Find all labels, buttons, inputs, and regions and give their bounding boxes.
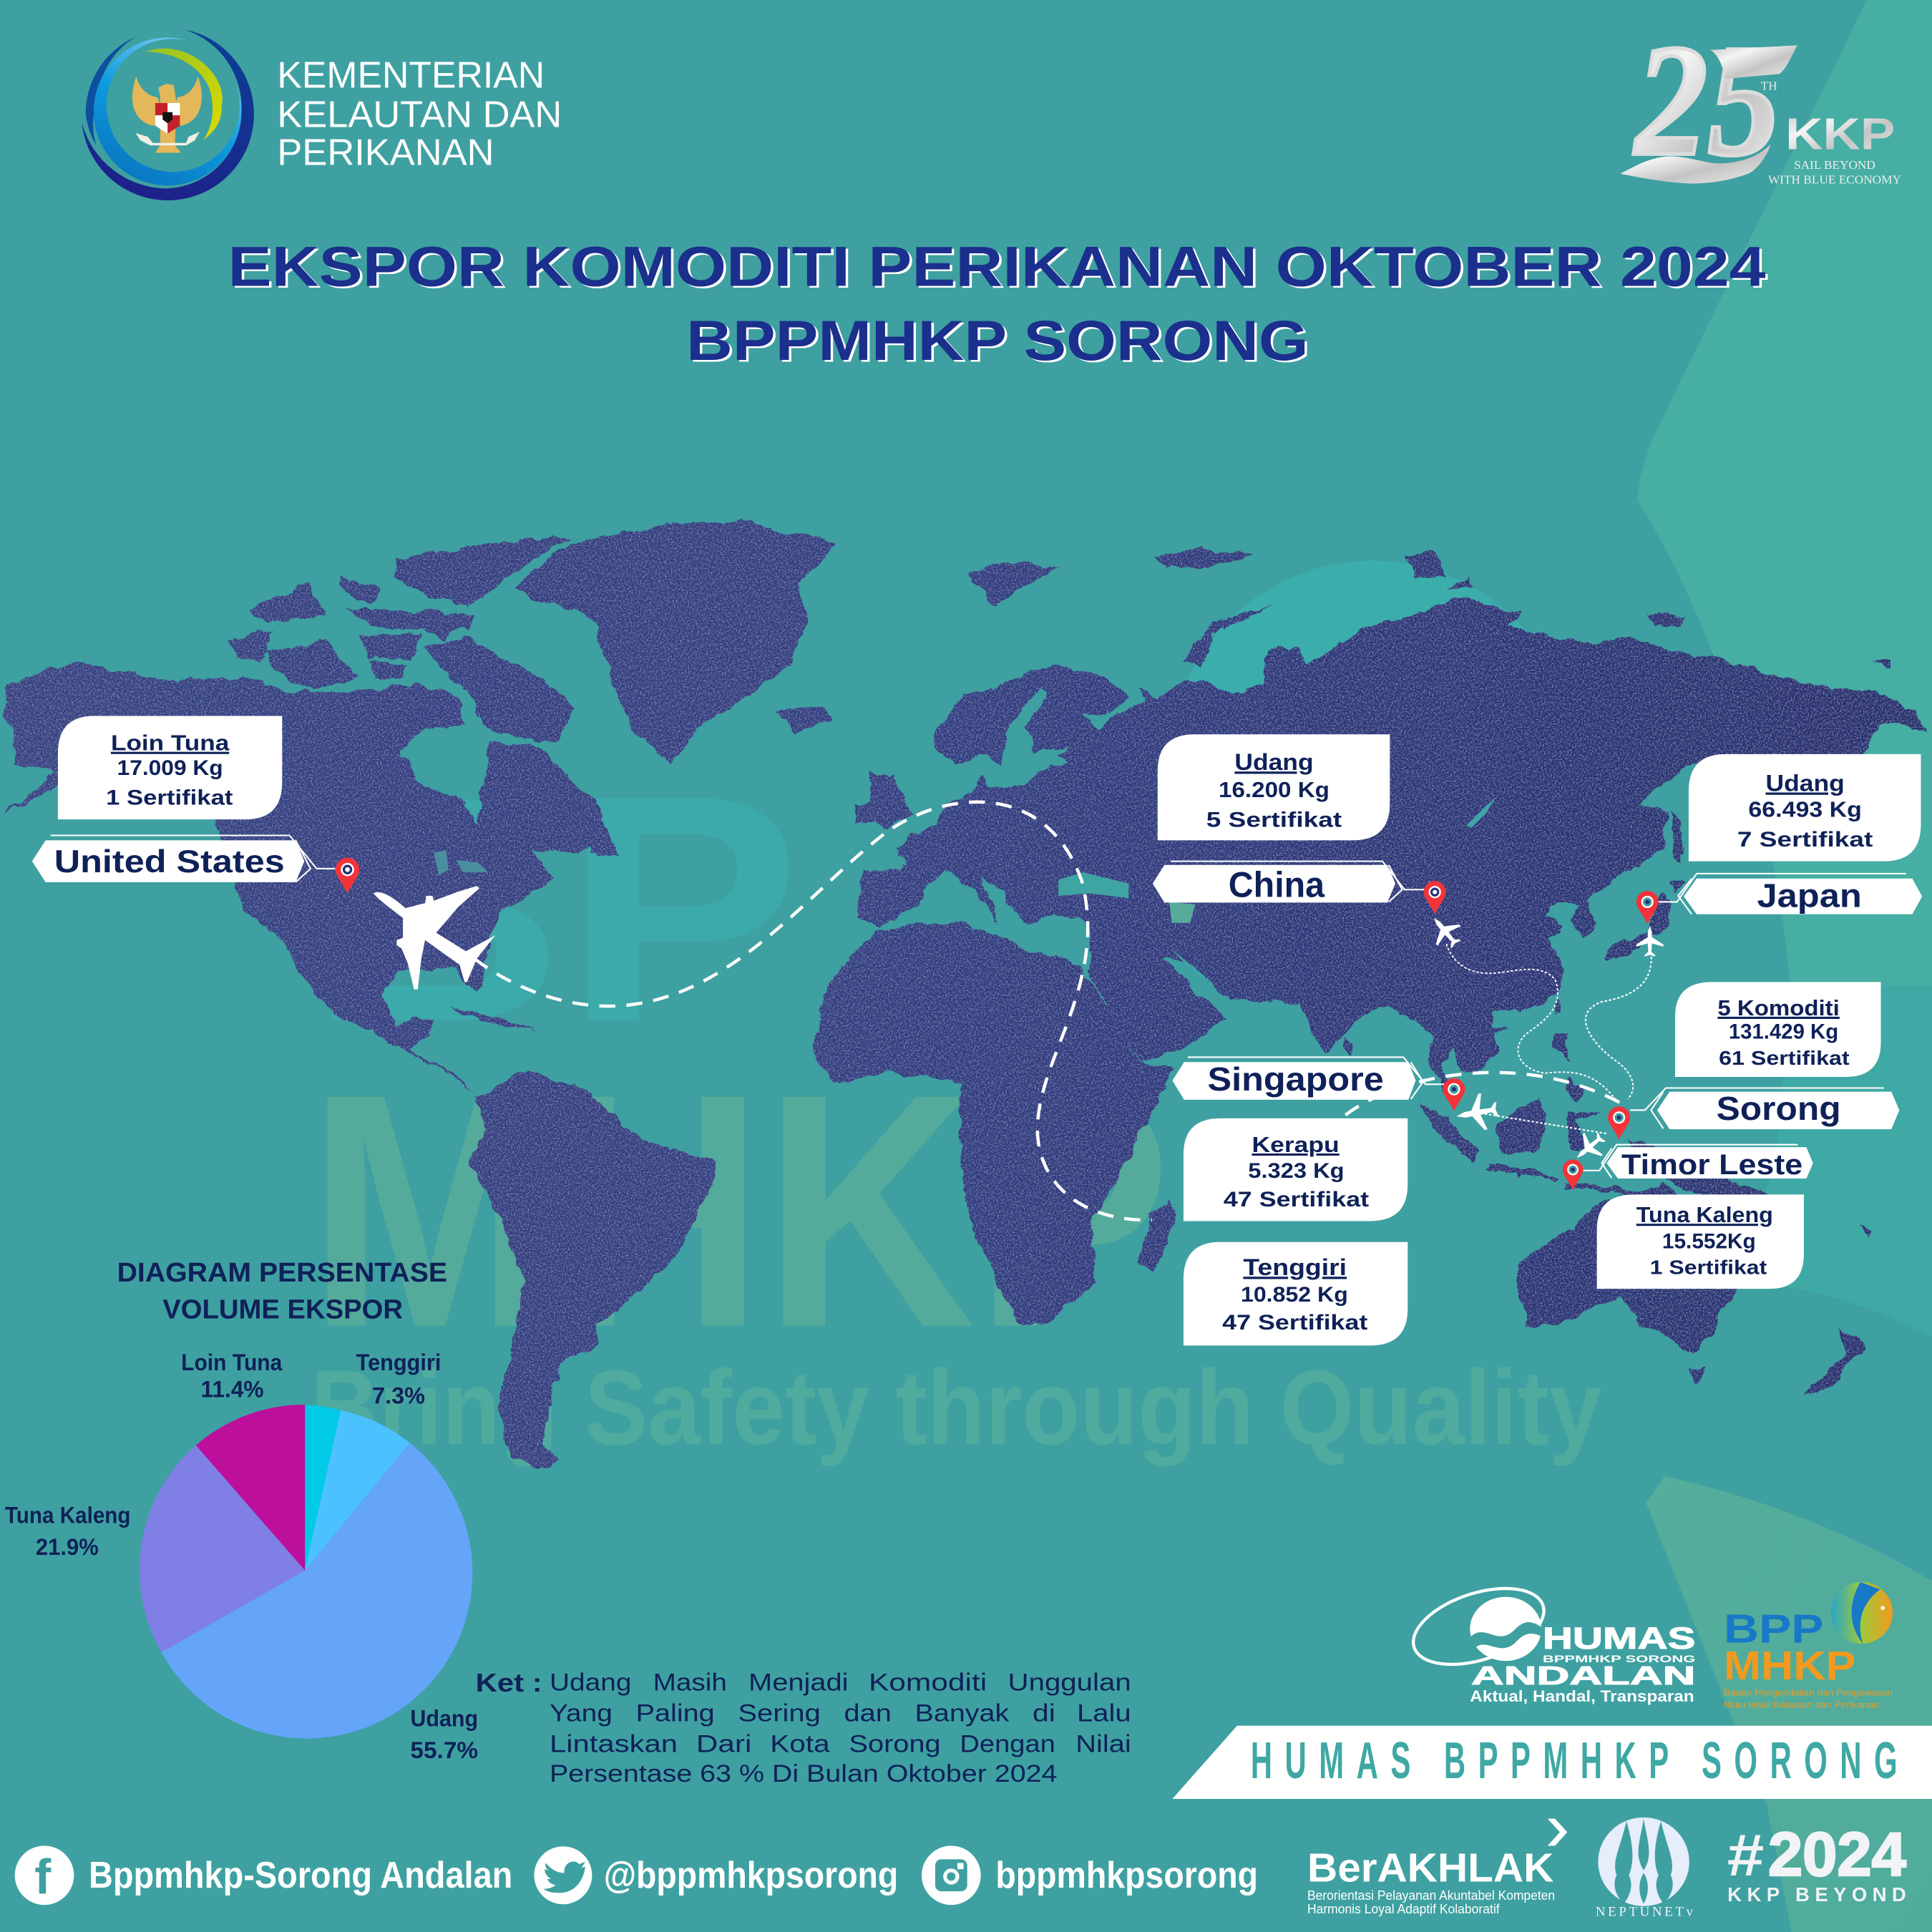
logo: 25th KKP anniversary: WITH BLUE ECONOMY xyxy=(1768,173,1901,187)
logo: 25th KKP anniversary: KKP xyxy=(1785,109,1895,159)
map: Arctic islands xyxy=(230,537,618,857)
text block: keterangan: Komoditi xyxy=(869,1669,987,1696)
logo: Humas Andalan xyxy=(1404,1574,1695,1705)
map: Africa xyxy=(813,923,1176,1324)
callout: Udang Japan: 66.493 Kg xyxy=(1748,797,1862,822)
pie labels: 55.7% xyxy=(410,1737,478,1763)
icon: large airplane xyxy=(374,886,495,990)
logo: #2024 KKP Beyond xyxy=(1726,1820,1906,1906)
map: Kamchatka xyxy=(1775,737,1873,850)
logo: BerAKHLAK: Berorientasi Pelayanan Akuntabel Kompeten xyxy=(1307,1888,1555,1903)
title: BPPMHKP SORONG xyxy=(686,308,1309,372)
panel: China xyxy=(1153,734,1446,914)
callout: 5 Komoditi: 131.429 Kg xyxy=(1729,1021,1838,1044)
heading: ministry name xyxy=(277,54,562,173)
callout: Tuna Kaleng: Tuna Kaleng xyxy=(1636,1202,1773,1227)
text block: keterangan: Dari xyxy=(696,1731,751,1758)
panel: Timor Leste xyxy=(1563,1145,1813,1289)
label: United States: United States xyxy=(54,844,285,879)
connector: Sorong xyxy=(1630,1088,1884,1128)
pin: Singapore xyxy=(1443,1078,1465,1111)
callout: Udang China xyxy=(1158,734,1390,840)
social: Twitter xyxy=(534,1846,898,1904)
map: Svalbard and Arctic Russia islands xyxy=(966,548,1890,667)
map: Australia xyxy=(1518,1183,1756,1382)
text block: keterangan: Nilai xyxy=(1075,1731,1131,1758)
pin: Timor Leste xyxy=(1563,1159,1583,1190)
logo: BerAKHLAK xyxy=(1307,1819,1567,1916)
callout: 5 Komoditi: 61 Sertifikat xyxy=(1719,1047,1850,1069)
map: South-East Asia islands xyxy=(1343,998,1870,1237)
logo: BPP MHKP xyxy=(1724,1582,1893,1710)
text block: keterangan: Yang xyxy=(550,1700,613,1727)
map: North America xyxy=(2,663,618,1094)
label: China: China xyxy=(1229,865,1325,905)
banner: Humas BPPMHKP Sorong xyxy=(1172,1726,1932,1799)
callout: Udang Japan xyxy=(1689,754,1921,862)
logo: #2024 KKP Beyond: KKP BEYOND xyxy=(1727,1883,1906,1906)
connector: Singapore xyxy=(1188,1057,1444,1099)
pie labels: 11.4% xyxy=(201,1376,263,1402)
callout: Tenggiri xyxy=(1184,1242,1407,1345)
pin: Japan xyxy=(1636,891,1659,924)
text block: keterangan: Lintaskan xyxy=(550,1731,678,1758)
title: EKSPOR KOMODITI PERIKANAN OKTOBER 2024 xyxy=(230,236,1768,300)
label: Sorong xyxy=(1657,1090,1899,1129)
logo: #2024 KKP Beyond: 2024 xyxy=(1768,1820,1906,1889)
text block: keterangan: Udang xyxy=(550,1669,631,1696)
callout: Udang Japan: Udang xyxy=(1766,769,1845,796)
social: Facebook: f xyxy=(34,1850,52,1905)
banner: Humas BPPMHKP Sorong: HUMAS BPPMHKP SORONG xyxy=(1251,1731,1898,1790)
logo: Humas Andalan: ANDALAN xyxy=(1471,1661,1695,1690)
pin: Sorong xyxy=(1608,1106,1630,1140)
logo: #2024 KKP Beyond: # xyxy=(1726,1822,1763,1888)
icon: China small airplane xyxy=(1423,908,1468,955)
logo: BerAKHLAK: Harmonis Loyal Adaptif Kolaboratif xyxy=(1307,1902,1501,1916)
logo: 25th KKP anniversary xyxy=(1620,12,1901,189)
route: Japan dotted line xyxy=(1586,952,1652,1099)
callout: Loin Tuna xyxy=(58,716,282,819)
callout: Tuna Kaleng: 1 Sertifikat xyxy=(1650,1256,1767,1278)
text block: keterangan: Persentase 63 % Di Bulan Oktober 2024 xyxy=(550,1760,1057,1787)
pie labels: Tenggiri xyxy=(356,1349,441,1375)
text block: keterangan xyxy=(476,1668,1131,1787)
text block: keterangan: Paling xyxy=(636,1700,715,1727)
text block: keterangan: Menjadi xyxy=(748,1669,849,1696)
callout: Loin Tuna: 1 Sertifikat xyxy=(106,786,233,809)
route: Singapore dotted line xyxy=(1485,1114,1606,1133)
logo: Neptune TV xyxy=(1596,1818,1693,1920)
title: BPPMHKP SORONG xyxy=(689,310,1311,374)
callout: Tenggiri: 47 Sertifikat xyxy=(1222,1312,1368,1335)
social: Facebook: Bppmhkp-Sorong Andalan xyxy=(89,1854,512,1896)
pie labels: 7.3% xyxy=(372,1382,425,1408)
label: Singapore: Singapore xyxy=(1208,1060,1384,1098)
watermark: slogan: Bring Safety through Quality xyxy=(311,1349,1602,1467)
connector: Timor Leste xyxy=(1584,1145,1797,1178)
label: United States xyxy=(32,840,304,882)
callout: Kerapu: 5.323 Kg xyxy=(1248,1160,1345,1183)
label: Singapore xyxy=(1172,1060,1416,1100)
panel: United States xyxy=(32,716,359,894)
logo: 25th KKP anniversary: SAIL BEYOND xyxy=(1794,158,1875,172)
social: Instagram: bppmhkpsorong xyxy=(995,1854,1258,1896)
title xyxy=(228,234,1768,374)
map: Greenland xyxy=(514,521,838,763)
map: Iceland xyxy=(776,708,831,733)
callout: Udang China: Udang xyxy=(1234,748,1314,775)
callout: Tenggiri: Tenggiri xyxy=(1243,1254,1347,1280)
pie labels: Loin Tuna xyxy=(181,1349,283,1375)
connector: United States xyxy=(51,835,335,882)
icon: Japan small airplane xyxy=(1636,926,1664,957)
callout: Tenggiri: 10.852 Kg xyxy=(1241,1284,1348,1307)
callout: Udang Japan: 7 Sertifikat xyxy=(1737,829,1873,852)
watermark: BPP letters: BP xyxy=(308,728,801,1089)
text block: keterangan: dan xyxy=(844,1700,892,1727)
callout: Loin Tuna: 17.009 Kg xyxy=(117,757,223,780)
callout: Kerapu: 47 Sertifikat xyxy=(1224,1189,1369,1211)
text block: keterangan: Unggulan xyxy=(1008,1669,1131,1696)
text block: keterangan: Kota xyxy=(770,1731,831,1758)
social: Instagram xyxy=(922,1845,1258,1905)
logo: 25th KKP anniversary: 25 xyxy=(1633,12,1780,189)
social: Facebook xyxy=(15,1845,512,1905)
label: Japan xyxy=(1684,877,1922,914)
logo: Humas Andalan: HUMAS xyxy=(1543,1621,1695,1656)
map: UK and Ireland xyxy=(853,775,912,829)
callout: 5 Komoditi: 5 Komoditi xyxy=(1717,995,1840,1020)
panel: Sorong xyxy=(1608,982,1899,1140)
route: big dashed line xyxy=(474,802,1620,1220)
map: Japan and Sakhalin xyxy=(1603,811,1687,960)
callout: Loin Tuna: Loin Tuna xyxy=(111,731,230,756)
logo: Humas Andalan: BPPMHKP SORONG xyxy=(1543,1654,1695,1664)
text block: keterangan: Sorong xyxy=(849,1731,941,1758)
text block: keterangan: Ket : xyxy=(476,1668,542,1697)
map: Eurasia xyxy=(859,596,1930,1103)
logo: BPP MHKP: Badan Pengendalian dan Pengawasan xyxy=(1724,1687,1893,1697)
label: China xyxy=(1153,865,1395,905)
world map xyxy=(2,521,1930,1468)
logo: BPP MHKP: BPP xyxy=(1724,1606,1823,1652)
heading: ministry name: KELAUTAN DAN xyxy=(277,93,562,135)
pie chart xyxy=(140,1405,472,1739)
logo: Humas Andalan: Aktual, Handal, Transparan xyxy=(1470,1687,1694,1705)
callout: Tuna Kaleng xyxy=(1597,1194,1804,1289)
heading: ministry name: PERIKANAN xyxy=(277,132,494,173)
label: Sorong: Sorong xyxy=(1717,1090,1841,1127)
heading: pie chart title xyxy=(117,1258,447,1324)
social: Twitter: @bppmhkpsorong xyxy=(604,1854,898,1896)
label: Japan: Japan xyxy=(1757,877,1862,914)
map: Caribbean xyxy=(450,1005,536,1030)
pie labels: 21.9% xyxy=(36,1533,99,1560)
callout: Udang China: 5 Sertifikat xyxy=(1206,809,1342,831)
connector: China xyxy=(1171,862,1425,902)
text block: keterangan: Lalu xyxy=(1077,1700,1131,1727)
callout: Kerapu: Kerapu xyxy=(1252,1132,1340,1157)
logo: KKP ministry emblem xyxy=(82,29,254,200)
connector: Japan xyxy=(1659,874,1906,914)
heading: pie chart title: VOLUME EKSPOR xyxy=(162,1294,403,1324)
route: China dotted line xyxy=(1447,944,1615,1099)
pie labels: Udang xyxy=(410,1704,478,1731)
text block: keterangan: Dengan xyxy=(960,1731,1055,1758)
heading: pie chart title: DIAGRAM PERSENTASE xyxy=(117,1258,447,1288)
logo: BerAKHLAK: BerAKHLAK xyxy=(1307,1845,1553,1890)
pin: China xyxy=(1424,881,1446,914)
watermark: MHKP letters: MHKP xyxy=(308,1025,1171,1397)
panel: Japan xyxy=(1636,754,1922,924)
logo: Neptune TV: NEPTUNETv xyxy=(1596,1905,1693,1920)
map: New Zealand xyxy=(1804,1326,1868,1398)
label: Timor Leste: Timor Leste xyxy=(1621,1149,1802,1181)
pin: United States xyxy=(336,857,359,894)
map: inland seas xyxy=(434,797,1496,986)
map: South America xyxy=(468,1070,717,1468)
callout: Kerapu xyxy=(1184,1118,1407,1221)
text block: keterangan: Masih xyxy=(653,1669,727,1696)
title: EKSPOR KOMODITI PERIKANAN OKTOBER 2024 xyxy=(228,234,1766,298)
pie labels: Tuna Kaleng xyxy=(5,1501,131,1528)
callout: Udang China: 16.200 Kg xyxy=(1219,777,1330,802)
text block: keterangan: Sering xyxy=(738,1700,821,1727)
panel: Singapore xyxy=(1172,1057,1465,1345)
map: Madagascar xyxy=(1138,1201,1176,1272)
callout: 5 Komoditi xyxy=(1675,982,1881,1077)
logo: BPP MHKP: MHKP xyxy=(1724,1644,1855,1689)
pie labels xyxy=(5,1349,478,1763)
icon: Singapore small airplane xyxy=(1453,1091,1501,1134)
text block: keterangan: Banyak xyxy=(915,1700,1010,1727)
callout: Tuna Kaleng: 15.552Kg xyxy=(1662,1230,1756,1253)
heading: ministry name: KEMENTERIAN xyxy=(277,54,545,95)
icon: Timor small airplane xyxy=(1568,1126,1611,1169)
logo: BPP MHKP: Mutu Hasil Kelautan dan Perikanan xyxy=(1724,1700,1879,1710)
text block: keterangan: di xyxy=(1033,1700,1055,1727)
logo: 25th KKP anniversary: TH xyxy=(1761,79,1777,93)
